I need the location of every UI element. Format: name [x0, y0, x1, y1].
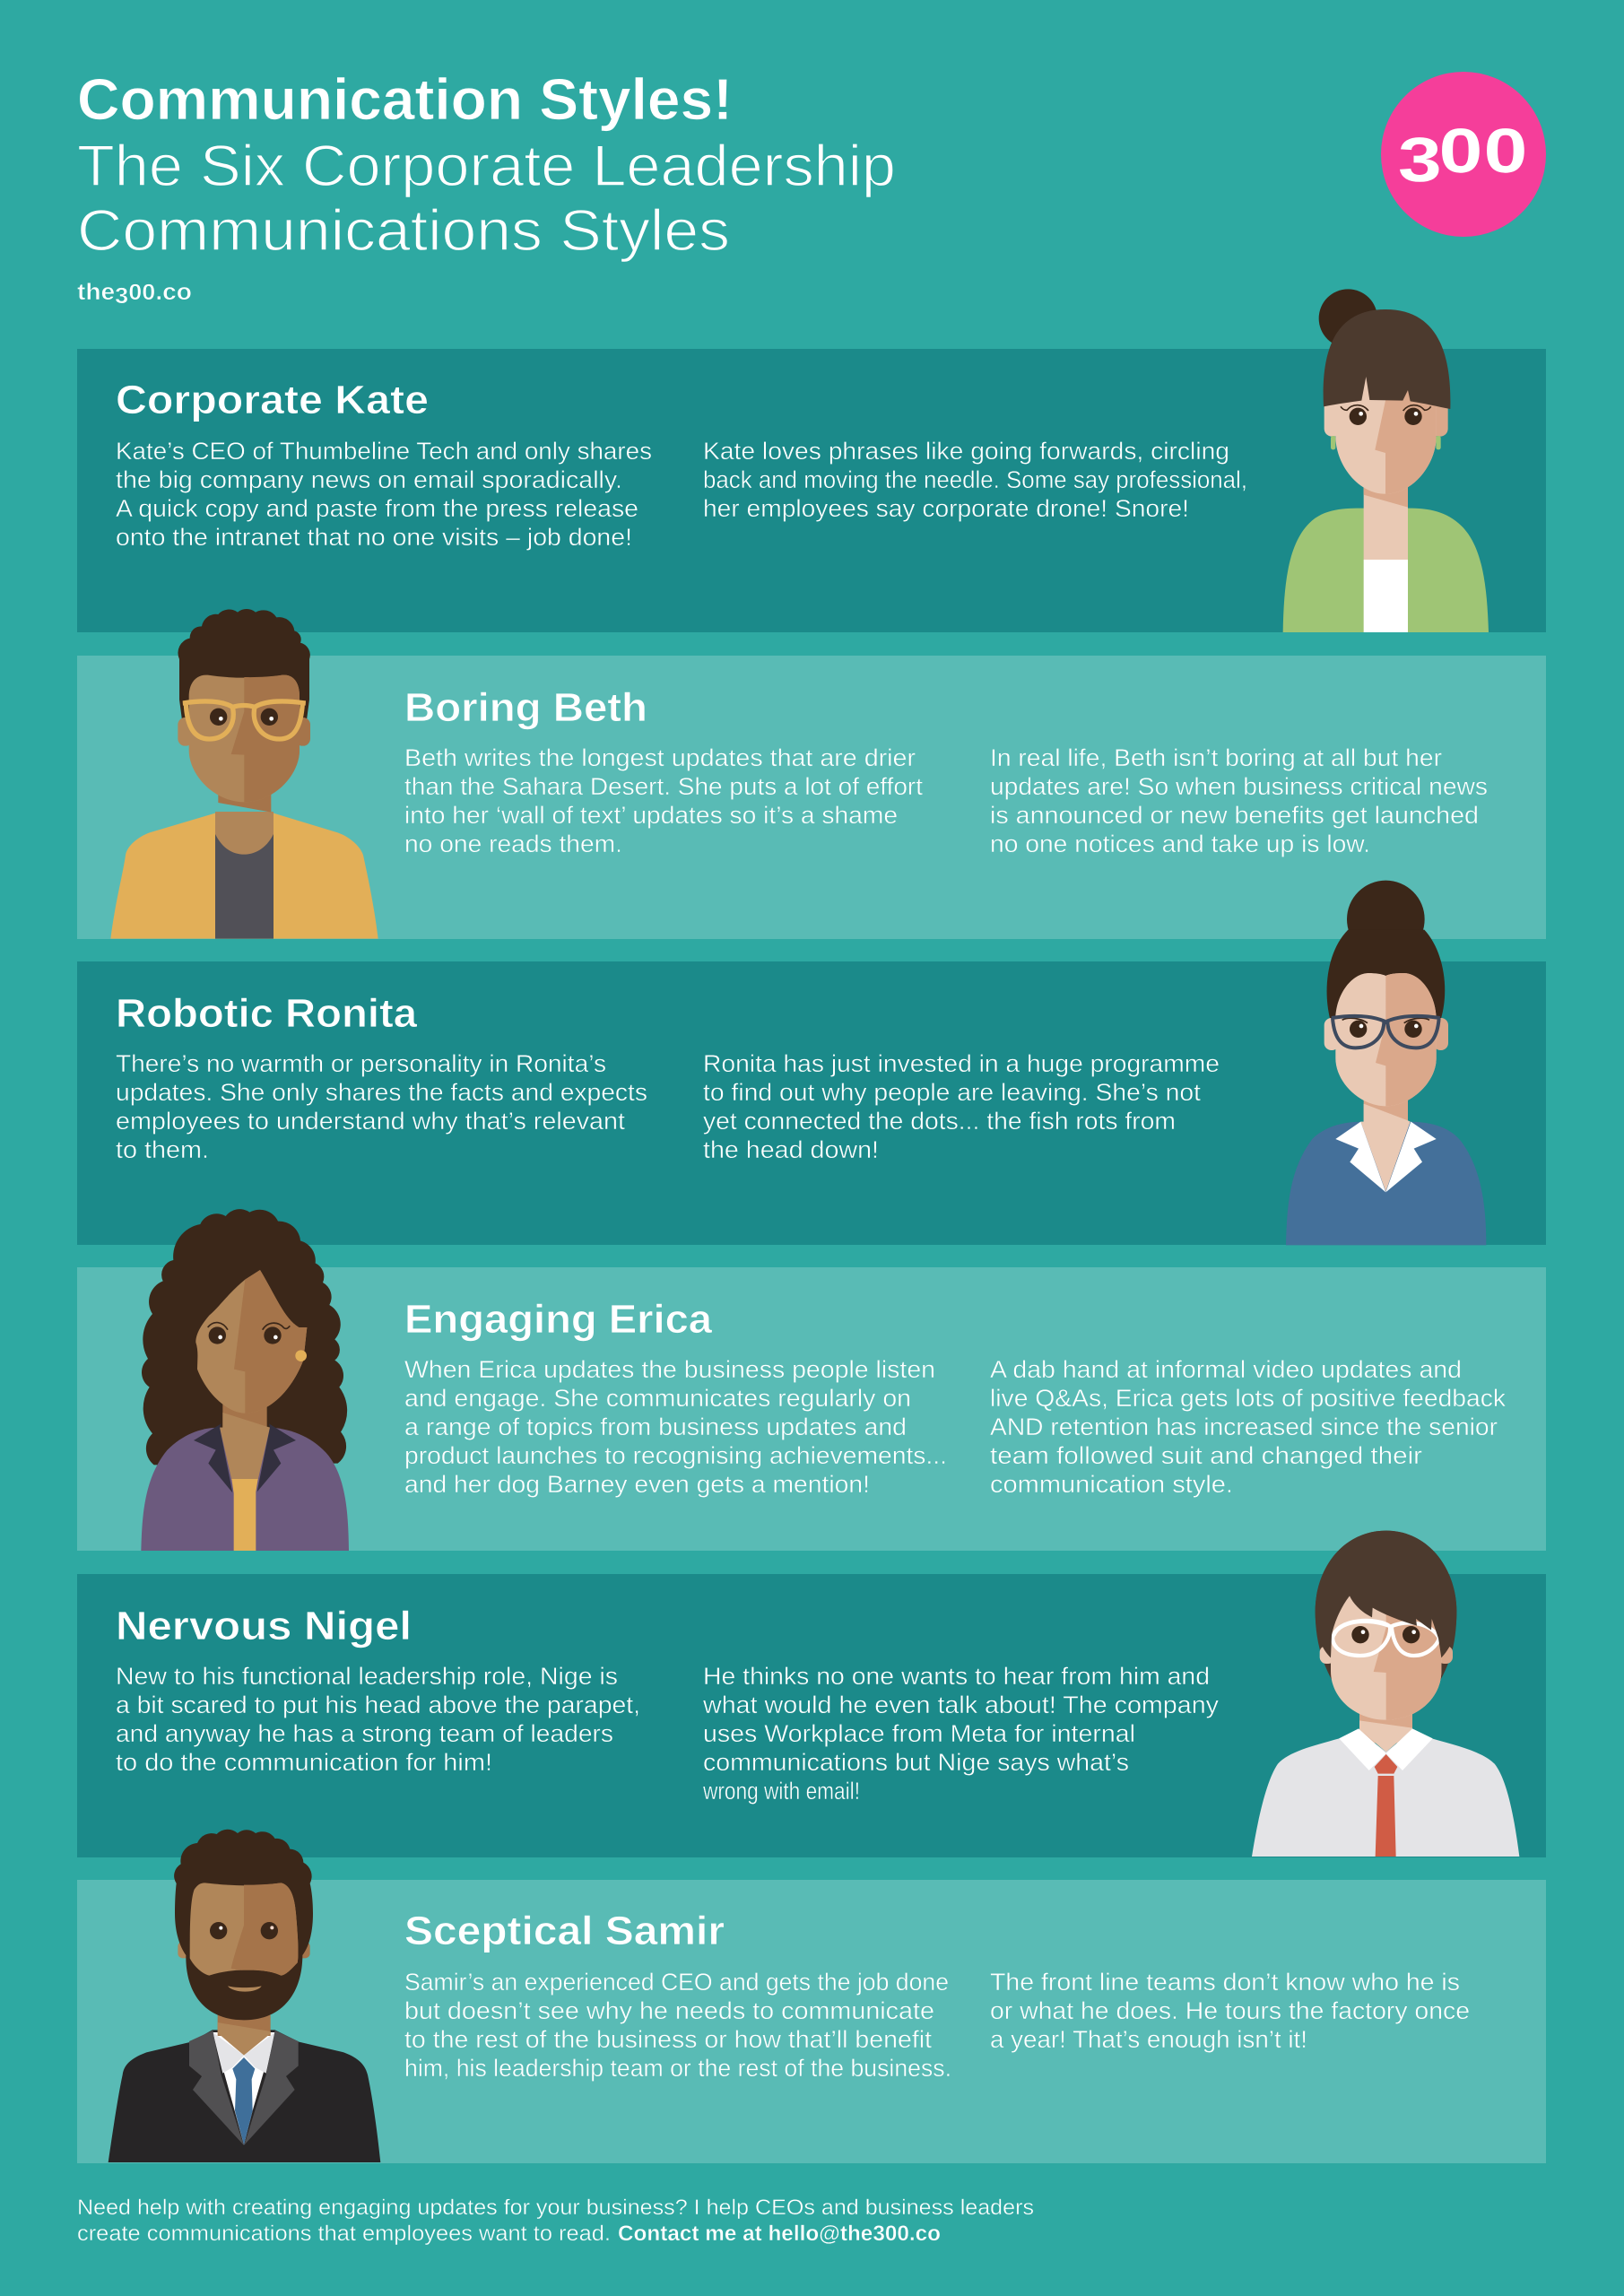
avatar: Erica: [141, 1209, 349, 1551]
text column 1: than the Sahara Desert. She puts a lot of effort: [404, 773, 924, 800]
logo badge: [1381, 72, 1546, 237]
panel: Boring Beth: [77, 609, 1546, 939]
avatar: Samir: [109, 1830, 380, 2162]
text column 1: [404, 744, 924, 857]
panel: Sceptical Samir: [77, 1830, 1546, 2163]
text column 2: [990, 1356, 1507, 1498]
text column 2: updates are! So when business critical news: [990, 773, 1488, 800]
avatar: Kate: [1283, 289, 1489, 632]
text column 2: In real life, Beth isn’t boring at all but her: [990, 744, 1442, 771]
website: the: [77, 278, 112, 305]
text column 1: employees to understand why that’s relevant: [116, 1108, 626, 1135]
text column 2: no one notices and take up is low.: [990, 831, 1370, 857]
footer text: Need help with creating engaging updates for your business? I help CEOs and business leaders: [77, 2196, 1034, 2220]
text column 1: There’s no warmth or personality in Ronita’s: [116, 1050, 606, 1077]
text column 2: communication style.: [990, 1471, 1233, 1498]
text column 1: [116, 1663, 640, 1776]
text column 1: Samir’s an experienced CEO and gets the job done: [404, 1969, 949, 1996]
avatar: Ronita: [1286, 881, 1486, 1245]
panel: Corporate Kate: [77, 289, 1546, 632]
text column 1: and her dog Barney even gets a mention!: [404, 1471, 870, 1498]
text column 1: and engage. She communicates regularly on: [404, 1385, 911, 1412]
website: .co: [155, 278, 189, 305]
title line 3: Communications Styles: [77, 197, 730, 263]
text column 2: team followed suit and changed their: [990, 1442, 1422, 1469]
text column 2: [703, 1050, 1220, 1163]
title line 2: The Six Corporate Leadership: [77, 133, 896, 198]
text column 1: New to his functional leadership role, Nige is: [116, 1663, 618, 1690]
website: 3: [115, 283, 128, 309]
text column 2: Kate loves phrases like going forwards, circling: [703, 438, 1229, 465]
text column 1: a range of topics from business updates and: [404, 1413, 907, 1440]
text column 2: [990, 1969, 1470, 2053]
text column 1: a bit scared to put his head above the parapet,: [116, 1692, 640, 1718]
text column 1: [116, 1050, 647, 1163]
text column 1: A quick copy and paste from the press release: [116, 495, 638, 522]
heading: Sceptical Samir: [404, 1908, 725, 1953]
text column 1: him, his leadership team or the rest of the business.: [404, 2055, 951, 2082]
text column 2: He thinks no one wants to hear from him and: [703, 1663, 1210, 1690]
text column 2: the head down!: [703, 1136, 879, 1163]
title block: [77, 66, 896, 309]
text column 2: what would he even talk about! The company: [702, 1692, 1220, 1718]
text column 1: into her ‘wall of text’ updates so it’s a shame: [404, 802, 898, 829]
text column 1: product launches to recognising achievements...: [404, 1442, 947, 1469]
logo badge: 0: [1439, 116, 1482, 186]
text column 1: When Erica updates the business people listen: [404, 1356, 935, 1383]
website: 00: [128, 280, 155, 305]
text column 1: Kate’s CEO of Thumbeline Tech and only shares: [116, 438, 652, 465]
text column 2: Ronita has just invested in a huge programme: [703, 1050, 1220, 1077]
text column 1: and anyway he has a strong team of leaders: [116, 1720, 613, 1747]
logo badge: 3: [1398, 125, 1442, 195]
text column 1: but doesn’t see why he needs to communicate: [404, 1997, 934, 2024]
text column 1: to them.: [116, 1136, 209, 1163]
text column 1: updates. She only shares the facts and expects: [116, 1079, 647, 1106]
text column 2: wrong with email!: [702, 1778, 860, 1805]
logo badge: 0: [1484, 116, 1527, 186]
footer text: [77, 2196, 1034, 2246]
text column 2: a year! That’s enough isn’t it!: [990, 2026, 1307, 2053]
panel: Engaging Erica: [77, 1209, 1546, 1551]
text column 1: [116, 438, 652, 551]
footer text: create communications that employees want to read.: [77, 2222, 611, 2246]
text column 1: the big company news on email sporadically.: [116, 466, 622, 493]
heading: Nervous Nigel: [116, 1603, 412, 1648]
text column 1: to do the communication for him!: [116, 1749, 492, 1776]
avatar: Beth: [110, 609, 378, 939]
text column 2: back and moving the needle. Some say professional,: [703, 466, 1247, 493]
text column 1: to the rest of the business or how that’ll benefit: [404, 2026, 933, 2053]
text column 2: live Q&As, Erica gets lots of positive feedback: [990, 1385, 1507, 1412]
heading: Robotic Ronita: [116, 990, 418, 1036]
text column 2: AND retention has increased since the senior: [990, 1413, 1498, 1440]
text column 2: or what he does. He tours the factory once: [990, 1997, 1470, 2024]
text column 2: is announced or new benefits get launched: [990, 802, 1479, 829]
panel: Nervous Nigel: [77, 1531, 1546, 1857]
text column 2: her employees say corporate drone! Snore!: [703, 495, 1189, 522]
text column 2: [702, 1663, 1220, 1805]
heading: Engaging Erica: [404, 1296, 713, 1342]
text column 1: [404, 1356, 947, 1498]
panel: Robotic Ronita: [77, 881, 1546, 1245]
text column 2: [990, 744, 1488, 857]
text column 1: [404, 1969, 951, 2082]
title line 1: Communication Styles!: [77, 66, 733, 132]
text column 2: to find out why people are leaving. She’s not: [703, 1079, 1202, 1106]
text column 2: A dab hand at informal video updates and: [990, 1356, 1462, 1383]
heading: Corporate Kate: [116, 377, 429, 422]
text column 2: [703, 438, 1247, 522]
text column 1: Beth writes the longest updates that are drier: [404, 744, 916, 771]
text column 2: yet connected the dots... the fish rots from: [703, 1108, 1176, 1135]
contact call to action: Contact me at hello@the300.co: [618, 2222, 941, 2246]
text column 1: onto the intranet that no one visits – job done!: [116, 524, 632, 551]
text column 2: uses Workplace from Meta for internal: [703, 1720, 1135, 1747]
text column 1: no one reads them.: [404, 831, 622, 857]
text column 2: The front line teams don’t know who he is: [990, 1969, 1460, 1996]
text column 2: communications but Nige says what’s: [703, 1749, 1129, 1776]
heading: Boring Beth: [404, 684, 647, 730]
avatar: Nigel: [1252, 1531, 1519, 1857]
